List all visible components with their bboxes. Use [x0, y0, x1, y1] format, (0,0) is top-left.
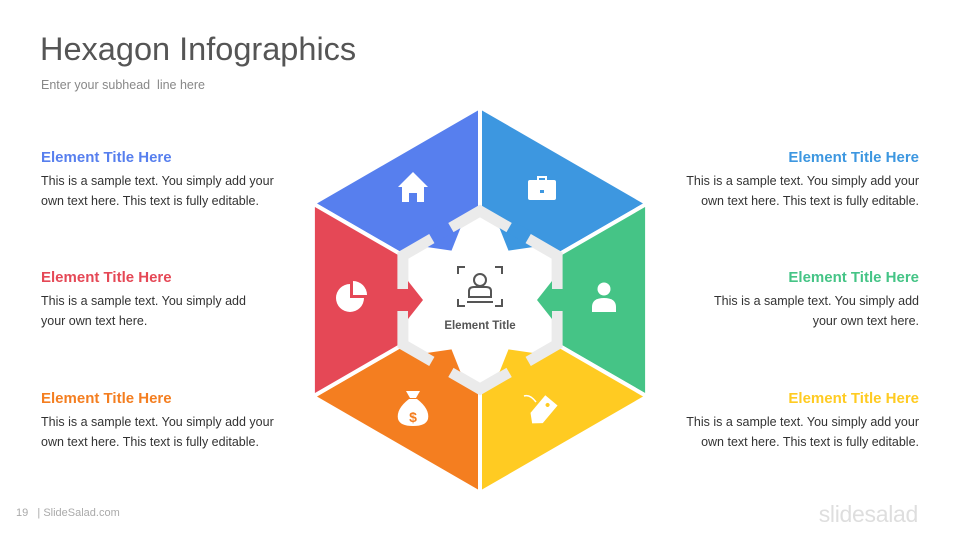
segment: red — [313, 204, 480, 396]
text block: left 2 — [41, 269, 246, 328]
icon: user — [592, 282, 616, 312]
text block: left 2: This is a sample text. You simply add your own text here. — [41, 294, 246, 328]
text block: right 3 — [686, 390, 919, 449]
segment: blue — [313, 107, 480, 300]
logo: slidesalad — [819, 501, 918, 527]
segment: yellow — [480, 300, 647, 493]
text block: left 2: Element Title Here — [41, 269, 172, 286]
icon: center user frame — [458, 267, 502, 306]
text block: right 1 — [686, 149, 919, 208]
icon: house — [398, 172, 428, 202]
text block: right 1: This is a sample text. You simply add your own text here. This text is fully editable. — [686, 174, 919, 208]
icon: money bag: $ — [409, 409, 417, 425]
segment: green — [480, 204, 647, 396]
text block: left 3 — [41, 390, 274, 449]
center label: Element Title — [444, 320, 516, 332]
text block: right 3: This is a sample text. You simply add your own text here. This text is fully editable. — [686, 415, 919, 449]
text block: left 3: This is a sample text. You simply add your own text here. This text is fully editable. — [41, 415, 274, 449]
text block: left 1: Element Title Here — [41, 149, 172, 166]
text block: right 3: Element Title Here — [788, 390, 919, 407]
subhead: Enter your subhead line here — [41, 78, 205, 92]
text block: left 1 — [41, 149, 274, 208]
arrows — [395, 217, 565, 383]
text block: right 2 — [714, 269, 919, 328]
icon: tag — [526, 395, 558, 428]
segment: light blue — [480, 107, 647, 300]
title: Hexagon Infographics — [40, 31, 356, 67]
icon: briefcase — [528, 176, 556, 200]
text block: right 2: This is a sample text. You simply add your own text here. — [714, 294, 919, 328]
center ring — [403, 211, 557, 389]
icon: pie chart — [336, 281, 367, 312]
text block: left 3: Element Title Here — [41, 390, 172, 407]
icon: money bag — [398, 391, 428, 426]
text block: right 2: Element Title Here — [788, 269, 919, 286]
segment: orange — [313, 300, 480, 493]
text block: left 1: This is a sample text. You simply add your own text here. This text is fully editable. — [41, 174, 274, 208]
text block: right 1: Element Title Here — [788, 149, 919, 166]
footer: 19 | SlideSalad.com — [16, 507, 120, 519]
